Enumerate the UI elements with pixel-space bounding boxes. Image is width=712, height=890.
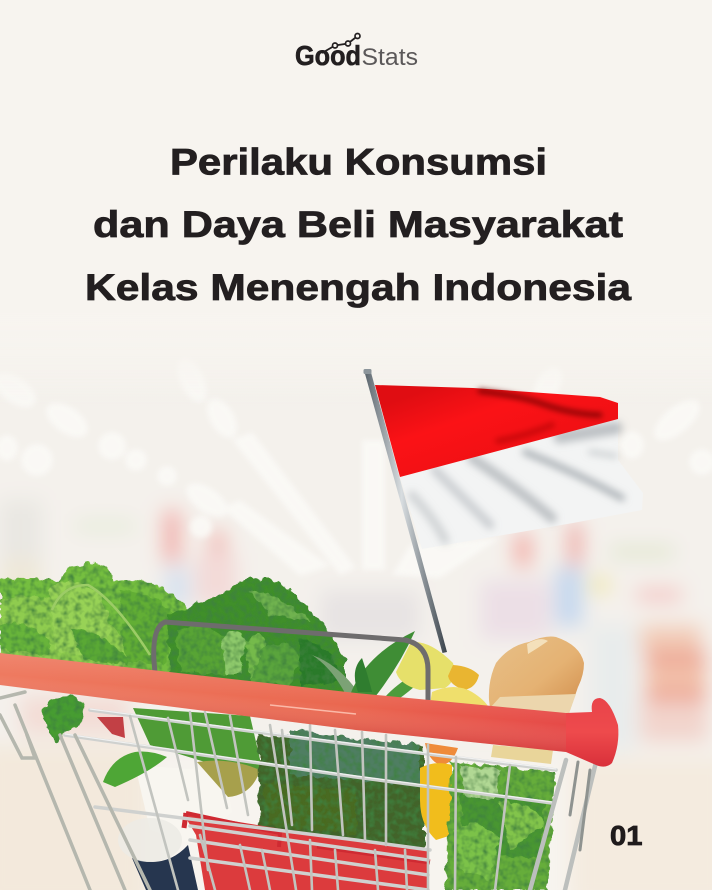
yellow bottle [420, 763, 452, 840]
basket contents [42, 695, 555, 890]
title [85, 142, 631, 308]
pineapple leaves [312, 631, 435, 698]
flag: Indonesia [364, 369, 643, 653]
title: Kelas Menengah Indonesia [85, 267, 631, 308]
page number: 01 [610, 820, 642, 851]
bread [489, 637, 584, 764]
background: blurred supermarket aisle [0, 312, 712, 890]
bananas [396, 642, 489, 708]
greens behind wires [103, 752, 167, 787]
title: dan Daya Beli Masyarakat [93, 204, 623, 245]
vegetables: light green parsley [0, 563, 200, 680]
orange [425, 743, 458, 765]
dark bottle [132, 845, 198, 890]
left frame [0, 692, 150, 890]
flag white stripe [400, 419, 643, 549]
logo wordmark: Good [295, 40, 361, 71]
logo: GoodStats [295, 34, 418, 71]
vertical wires [130, 712, 510, 890]
cart handle end cap [566, 698, 618, 767]
logo wordmark [295, 40, 418, 71]
red cart handle rail [0, 653, 618, 767]
lettuce in basket [445, 762, 555, 890]
shopping cart with groceries [0, 563, 618, 890]
gray handle [154, 622, 428, 700]
vegetables: parsley stem [52, 585, 150, 655]
flag pole [364, 370, 447, 653]
vegetables: dark green lettuce [168, 578, 345, 695]
white bag [135, 765, 232, 845]
flag red stripe [375, 385, 618, 477]
horizontal wires [65, 710, 556, 890]
logo chart line [322, 34, 360, 53]
frilly parsley leaf by frame [42, 695, 85, 742]
logo wordmark: Stats [362, 44, 418, 71]
red child seat [183, 813, 430, 890]
right frame [530, 760, 596, 890]
pineapple body [258, 730, 425, 850]
wire basket [0, 692, 596, 890]
title: Perilaku Konsumsi [170, 142, 547, 182]
